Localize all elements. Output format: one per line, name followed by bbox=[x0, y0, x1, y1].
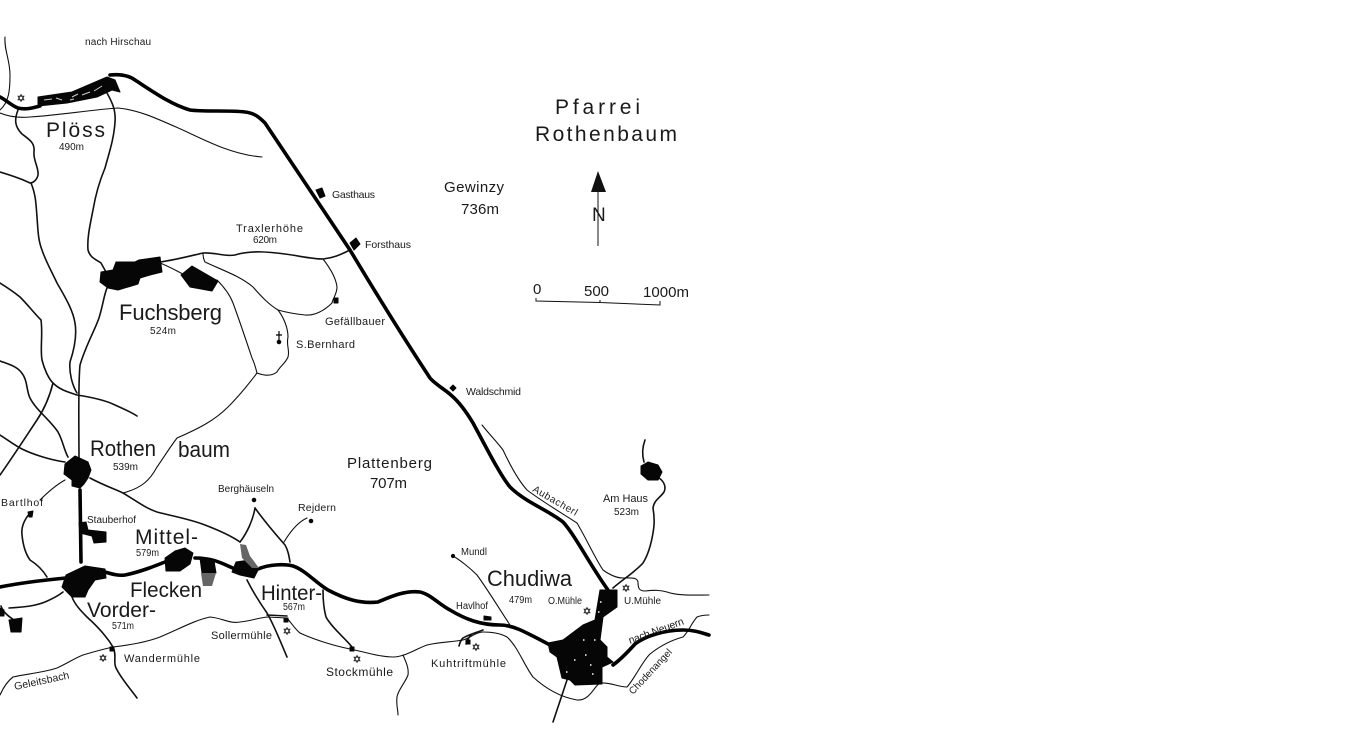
label: Gewinzy altitude: 736m bbox=[461, 201, 499, 218]
village: Vorderflecken bbox=[62, 566, 106, 597]
label: Flecken: Flecken bbox=[130, 579, 202, 602]
label: Chodenangel: Chodenangel bbox=[627, 647, 675, 697]
label: Plöss altitude: 490m bbox=[59, 142, 84, 153]
title: Rothenbaum bbox=[535, 123, 677, 146]
label: Gasthaus: Gasthaus bbox=[332, 189, 375, 201]
village: Mittelflecken bbox=[165, 548, 193, 571]
scale bar: 500 bbox=[584, 283, 609, 300]
scale bar bbox=[533, 281, 689, 305]
village: Hinterflecken bbox=[232, 560, 258, 578]
label: Am Haus: Am Haus bbox=[603, 493, 648, 505]
icons: mills bbox=[18, 94, 629, 662]
label: Bartlhof: Bartlhof bbox=[1, 497, 43, 509]
farm: Stauberhof bbox=[79, 522, 106, 543]
label: baum: baum bbox=[178, 437, 230, 462]
label: Waldschmid: Waldschmid bbox=[466, 386, 521, 398]
label: Sollermühle: Sollermühle bbox=[211, 630, 272, 642]
village: Plöss bbox=[38, 77, 120, 106]
farm squares bbox=[0, 188, 491, 651]
label: Vorder-: Vorder- bbox=[87, 599, 156, 622]
label: Mundl: Mundl bbox=[461, 547, 487, 558]
label: Hinterflecken altitude: 567m bbox=[283, 602, 305, 613]
label: Plattenberg altitude: 707m bbox=[370, 475, 407, 492]
title: Pfarrei bbox=[555, 96, 640, 119]
icon: north arrow bbox=[591, 171, 606, 246]
label: Gewinzy: Gewinzy bbox=[444, 179, 504, 196]
label: Aubacherl: Aubacherl bbox=[530, 484, 579, 519]
label: Mittel-: Mittel- bbox=[135, 526, 198, 549]
label: Traxlerhöhe altitude: 620m bbox=[253, 235, 277, 246]
label: Chudiwa: Chudiwa bbox=[487, 566, 573, 591]
label: Forsthaus: Forsthaus bbox=[365, 239, 411, 251]
label: Kuhtriftmühle: Kuhtriftmühle bbox=[431, 658, 506, 670]
town: Neuern bbox=[548, 590, 617, 685]
streams and minor roads bbox=[0, 37, 709, 722]
label: Plöss: Plöss bbox=[46, 119, 105, 142]
icon: chapel S. Bernhard bbox=[276, 331, 282, 344]
label: U. Mühle: U.Mühle bbox=[624, 595, 661, 607]
hamlet: Am Haus bbox=[641, 462, 662, 480]
label: Rothen: Rothen bbox=[90, 436, 156, 461]
village: Mittelflecken east bbox=[200, 558, 216, 573]
label: nach Neuern: nach Neuern bbox=[627, 616, 686, 647]
village: Fuchsberg bbox=[100, 257, 218, 291]
label: O. Mühle: O.Mühle bbox=[548, 595, 582, 607]
label: Wandermühle: Wandermühle bbox=[124, 653, 200, 665]
place labels bbox=[1, 37, 686, 697]
label: Plattenberg: Plattenberg bbox=[347, 455, 432, 472]
label: Stockmühle: Stockmühle bbox=[326, 665, 393, 679]
label: Stauberhof: Stauberhof bbox=[87, 515, 136, 526]
label: Traxlerhöhe: Traxlerhöhe bbox=[236, 223, 303, 235]
label: Chudiwa altitude: 479m bbox=[509, 595, 532, 606]
label: Rothenbaum altitude: 539m bbox=[113, 462, 138, 473]
label: Havlhof: Havlhof bbox=[456, 601, 488, 612]
label: Fuchsberg altitude: 524m bbox=[150, 326, 176, 337]
icon: north arrow: N bbox=[592, 205, 606, 226]
label: Am Haus altitude: 523m bbox=[614, 507, 639, 518]
scale bar: 0 bbox=[533, 281, 541, 298]
label: Vorderflecken altitude: 571m bbox=[112, 621, 134, 632]
label: Berghäuseln: Berghäuseln bbox=[218, 483, 274, 495]
scale bar: 1000m bbox=[643, 284, 689, 301]
title bbox=[535, 96, 677, 146]
village: Rothenbaum bbox=[64, 456, 91, 488]
label: Rejdern: Rejdern bbox=[298, 502, 336, 514]
villages bbox=[0, 77, 662, 685]
label: nach Hirschau: nach Hirschau bbox=[85, 37, 151, 48]
label: Hinter-: Hinter- bbox=[261, 582, 322, 605]
main road bbox=[0, 75, 709, 665]
label: Mittelflecken altitude: 579m bbox=[136, 548, 159, 559]
label: S. Bernhard: S.Bernhard bbox=[296, 339, 355, 351]
label: Fuchsberg: Fuchsberg bbox=[119, 300, 222, 325]
label: Geleitsbach: Geleitsbach bbox=[13, 670, 71, 693]
label: Gefällbauer: Gefällbauer bbox=[325, 316, 385, 328]
